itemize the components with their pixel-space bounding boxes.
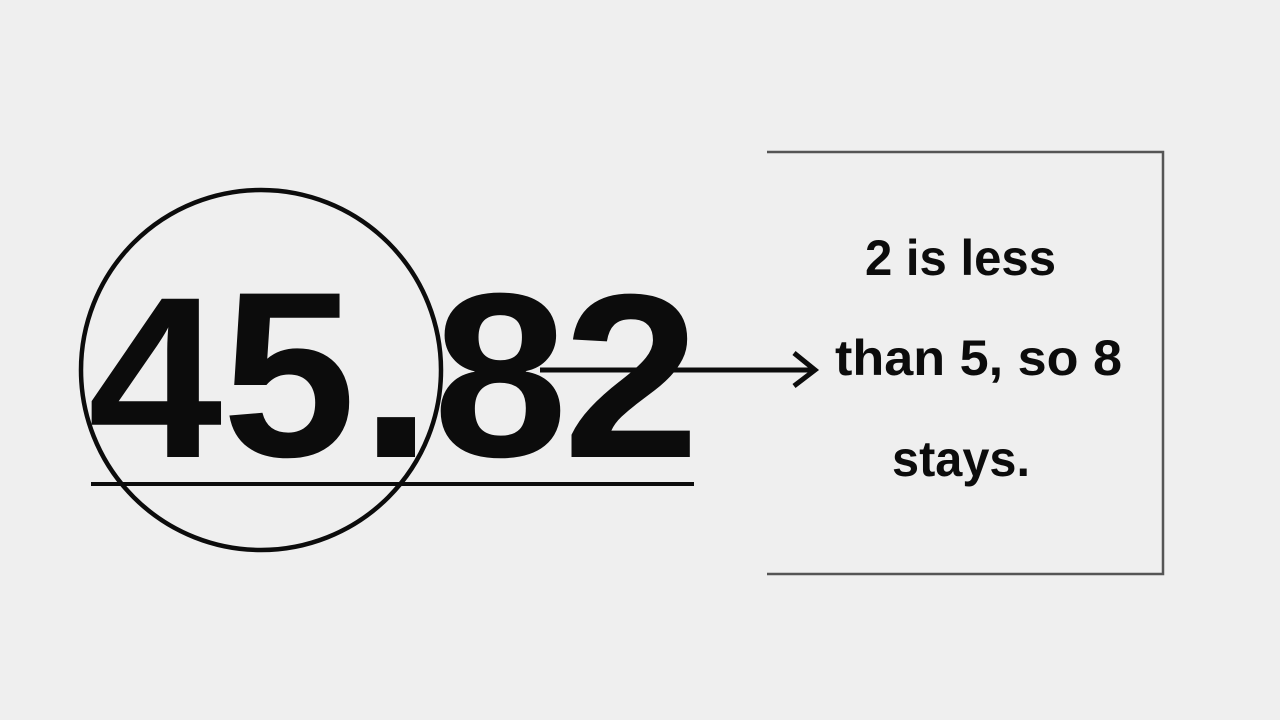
number 45.82: 4 bbox=[88, 249, 222, 506]
explanation text: stays. bbox=[892, 431, 1030, 487]
arrow bbox=[540, 353, 815, 386]
explanation box bbox=[767, 152, 1163, 574]
underline bbox=[91, 482, 694, 486]
number 45.82: 5 bbox=[222, 242, 356, 506]
number 45.82: 2 bbox=[563, 245, 700, 507]
circle around 45 bbox=[81, 190, 441, 550]
explanation text: 2 is less bbox=[865, 230, 1056, 286]
number 45.82: . bbox=[359, 214, 433, 514]
explanation text bbox=[835, 230, 1122, 487]
number 45.82: 8 bbox=[433, 245, 568, 506]
explanation text: than 5, so 8 bbox=[835, 330, 1122, 386]
number 45.82 bbox=[88, 214, 700, 514]
